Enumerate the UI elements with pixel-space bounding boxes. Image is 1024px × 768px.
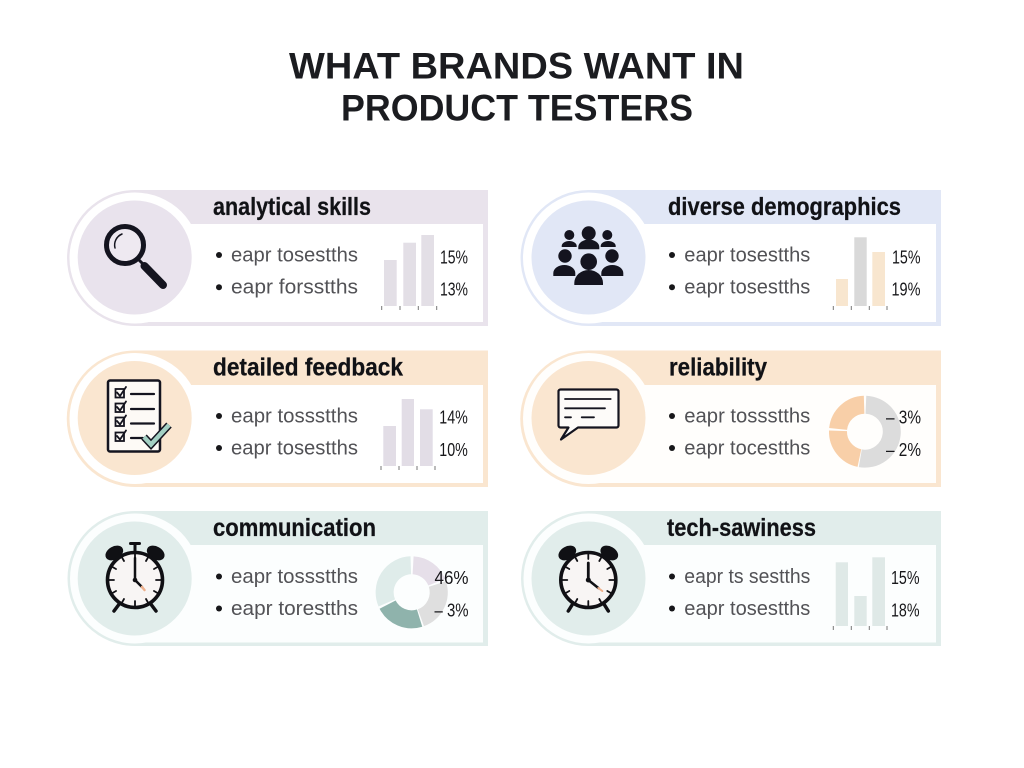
- bullet list: eapr tocestths: [684, 437, 810, 459]
- panel: reliability: [520, 350, 941, 487]
- bullet list: [669, 245, 810, 298]
- heading: analytical skills: analytical skills: [213, 193, 371, 221]
- percentages: 46%: [434, 568, 468, 588]
- bar chart: [382, 235, 437, 310]
- percentages: 19%: [892, 280, 920, 300]
- bullet list: eapr tosestths: [231, 437, 358, 459]
- percentages: – 3%: [886, 408, 921, 428]
- bar chart: [833, 237, 887, 310]
- bullet list: eapr tossstths: [684, 405, 810, 427]
- percentages: 15%: [892, 247, 920, 267]
- bullet list: [216, 566, 358, 620]
- bullet list: [669, 405, 810, 459]
- icon: alarm clock: [556, 543, 621, 611]
- percentages: – 2%: [886, 440, 921, 460]
- icon: checklist: [108, 380, 169, 452]
- bullet list: [216, 245, 358, 298]
- heading: communication: communication: [213, 514, 376, 542]
- title: WHAT BRANDS WANT IN: [289, 45, 744, 86]
- bullet list: eapr forsstths: [231, 276, 358, 298]
- title: [289, 45, 744, 129]
- donut chart: [838, 405, 892, 459]
- heading: tech-sawiness: tech-sawiness: [667, 514, 816, 542]
- bullet list: [216, 405, 358, 459]
- bar chart: [381, 399, 435, 470]
- panel: detailed feedback: [67, 350, 488, 487]
- icon: magnifying glass: [106, 226, 163, 285]
- bullet list: eapr tosestths: [684, 245, 810, 267]
- bar chart: [833, 557, 887, 630]
- panel: diverse demographics: [521, 190, 941, 326]
- percentages: 18%: [891, 600, 920, 620]
- heading: diverse demographics: diverse demographics: [668, 193, 901, 221]
- panel: communication: [68, 511, 488, 646]
- percentages: [892, 247, 920, 300]
- percentages: [886, 408, 921, 460]
- bullet list: eapr tossstths: [231, 566, 358, 588]
- percentages: [891, 568, 920, 620]
- bullet list: eapr tossstths: [231, 405, 358, 427]
- heading: detailed feedback: detailed feedback: [213, 354, 403, 382]
- panel: tech-sawiness: [521, 511, 941, 646]
- bullet list: eapr ts sestths: [684, 566, 810, 588]
- percentages: 15%: [891, 568, 920, 588]
- donut chart: [385, 565, 439, 619]
- percentages: 13%: [440, 280, 468, 300]
- title: PRODUCT TESTERS: [341, 88, 693, 129]
- bullet list: [669, 566, 810, 620]
- percentages: – 3%: [434, 600, 468, 620]
- icon: group of people: [553, 226, 623, 285]
- icon: speech bubble: [558, 390, 618, 440]
- percentages: [439, 408, 468, 460]
- percentages: [434, 568, 468, 620]
- icon: alarm clock: [103, 543, 167, 611]
- bullet list: eapr torestths: [231, 598, 358, 620]
- bullet list: eapr tosestths: [684, 598, 810, 620]
- percentages: 15%: [440, 247, 468, 267]
- bullet list: eapr tosestths: [684, 276, 810, 298]
- percentages: 10%: [439, 440, 468, 460]
- percentages: [440, 247, 468, 300]
- percentages: 14%: [439, 408, 468, 428]
- bullet list: eapr tosestths: [231, 245, 358, 267]
- heading: reliability: reliability: [669, 354, 767, 382]
- panel: analytical skills: [67, 190, 488, 326]
